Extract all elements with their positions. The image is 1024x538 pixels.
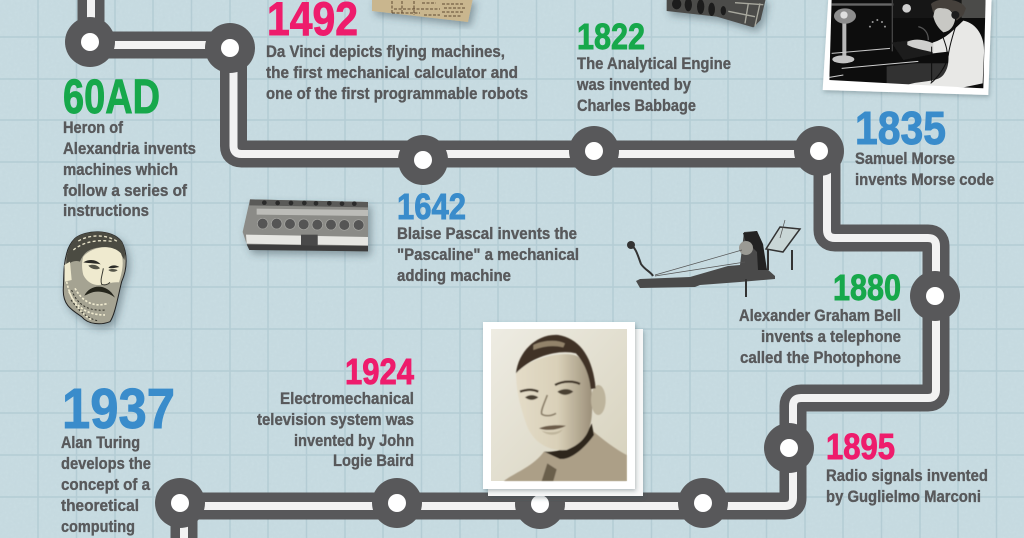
entry: 60AD Heron of Alexandria: Heron of xyxy=(63,119,123,137)
entry: 1642 Blaise Pascal: Blaise Pascal invents the xyxy=(397,225,577,243)
image: Photophone engraving xyxy=(627,220,800,297)
entry: 1937 Alan Turing: theoretical xyxy=(61,497,139,515)
entry: 1924 television: 1924 xyxy=(345,351,414,392)
entry: 1937 Alan Turing xyxy=(61,377,175,536)
entry: 1924 television: Logie Baird xyxy=(333,452,414,470)
image: Pascaline adding machine xyxy=(243,199,368,251)
entry: 1492 Da Vinci: Da Vinci depicts flying machines, xyxy=(266,43,505,61)
entry: 1924 television: invented by John xyxy=(294,432,414,450)
entry: 60AD Heron of Alexandria: machines which xyxy=(63,161,178,179)
entry: 1822 Analytical Engine: The Analytical Engine xyxy=(577,55,731,73)
entry: 1937 Alan Turing: Alan Turing xyxy=(61,434,140,452)
entry: 1835 Samuel Morse: Samuel Morse xyxy=(855,150,955,168)
entry: 1880 Alexander Graham Bell: called the Photophone xyxy=(740,349,901,367)
entry: 60AD Heron of Alexandria: follow a series of xyxy=(63,182,187,200)
entry: 1895 Marconi: by Guglielmo Marconi xyxy=(826,488,981,506)
entry: 1937 Alan Turing: 1937 xyxy=(62,377,175,441)
image: Analytical Engine xyxy=(667,0,766,27)
entry: 1895 Marconi xyxy=(826,426,988,506)
entry: 1492 Da Vinci: one of the first programmable robots xyxy=(266,85,528,103)
entry: 1895 Marconi: 1895 xyxy=(826,426,895,467)
entry: 1924 television: television system was xyxy=(257,411,414,429)
entry: 1937 Alan Turing: concept of a xyxy=(61,476,151,494)
image: Da Vinci parchment xyxy=(372,0,473,22)
entry: 1895 Marconi: Radio signals invented xyxy=(826,467,988,485)
entry: 1880 Alexander Graham Bell: Alexander Graham Bell xyxy=(739,307,901,325)
entry: 1642 Blaise Pascal: 1642 xyxy=(397,186,466,227)
entry: 1937 Alan Turing: develops the xyxy=(61,455,151,473)
entry: 60AD Heron of Alexandria xyxy=(63,71,196,220)
entry: 1822 Analytical Engine xyxy=(576,16,731,115)
image: Alan Turing photo xyxy=(483,322,643,496)
entry: 1880 Alexander Graham Bell: invents a telephone xyxy=(761,328,901,346)
entry: 1642 Blaise Pascal: "Pascaline" a mechanical xyxy=(397,246,579,264)
entry: 1492 Da Vinci: the first mechanical calculator and xyxy=(266,64,518,82)
entry: 1924 television xyxy=(257,351,414,470)
entry: 1492 Da Vinci xyxy=(266,0,528,103)
entry: 1880 Alexander Graham Bell: 1880 xyxy=(833,267,901,308)
entry: 60AD Heron of Alexandria: 60AD xyxy=(63,71,160,124)
entry: 1835 Samuel Morse: invents Morse code xyxy=(855,171,994,189)
entry: 1835 Samuel Morse: 1835 xyxy=(855,102,946,154)
entry: 1642 Blaise Pascal: adding machine xyxy=(397,267,511,285)
entry: 1924 television: Electromechanical xyxy=(280,390,414,408)
icon: Heron portrait xyxy=(63,232,126,324)
entry: 1822 Analytical Engine: Charles Babbage xyxy=(577,97,696,115)
entry: 1642 Blaise Pascal xyxy=(397,186,579,285)
entry: 1822 Analytical Engine: 1822 xyxy=(577,16,645,57)
entry: 1835 Samuel Morse xyxy=(855,102,994,189)
entry: 60AD Heron of Alexandria: Alexandria invents xyxy=(63,140,196,158)
entry: 1880 Alexander Graham Bell xyxy=(739,267,901,367)
entry: 1822 Analytical Engine: was invented by xyxy=(576,76,692,94)
entry: 60AD Heron of Alexandria: instructions xyxy=(63,202,149,220)
entry: 1937 Alan Turing: computing xyxy=(61,518,135,536)
image: telegraph operator photo xyxy=(823,0,992,95)
